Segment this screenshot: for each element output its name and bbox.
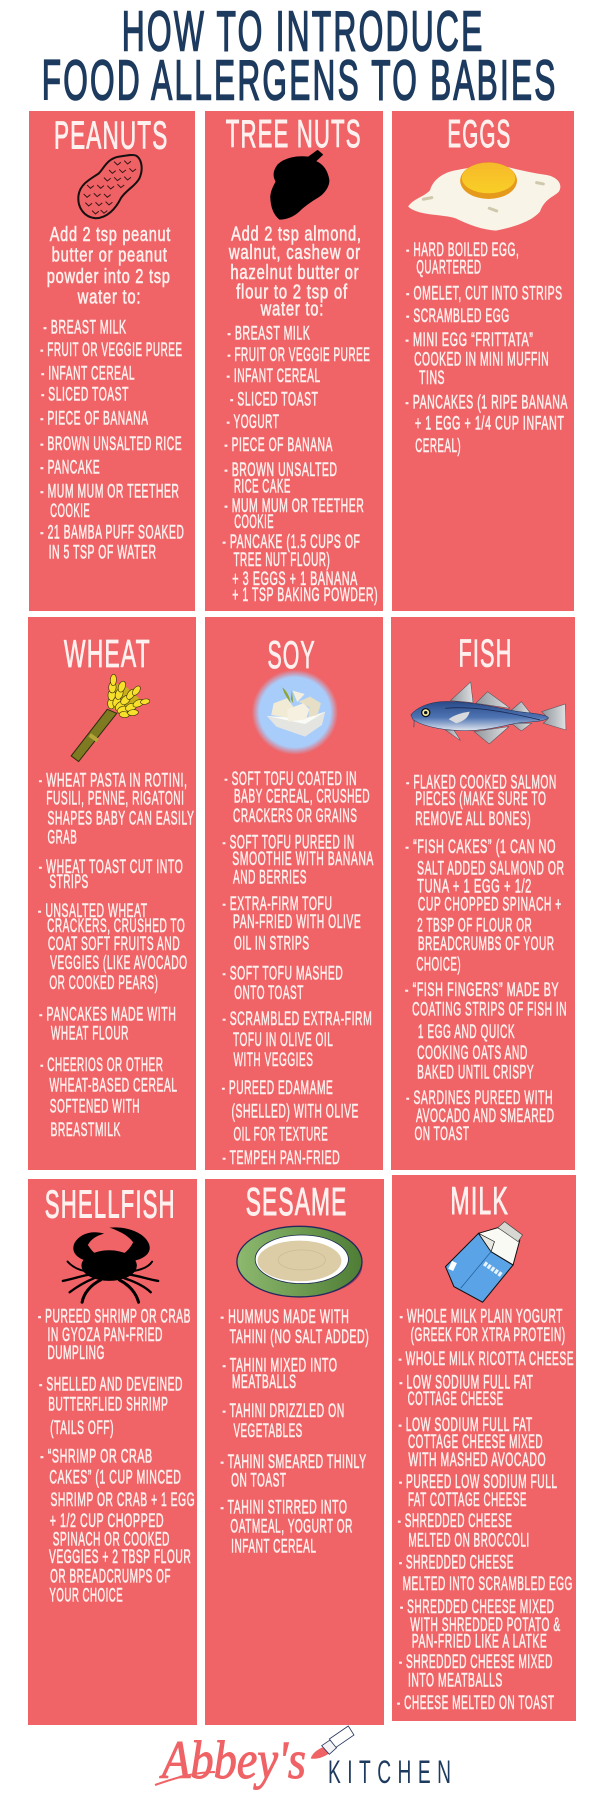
icon: fish [411, 682, 566, 744]
panel: shellfish [28, 1179, 197, 1725]
list: milk: INTO MEATBALLS [408, 1669, 503, 1690]
list: sesame: MEATBALLS [232, 1371, 297, 1392]
list: eggs: CEREAL) [415, 435, 461, 456]
title [42, 0, 558, 112]
panel: soy [205, 617, 383, 1170]
list: shellfish: (TAILS OFF) [50, 1417, 114, 1438]
intro text: tree nuts: walnut, cashew or [228, 242, 361, 264]
list: sesame: VEGETABLES [233, 1420, 303, 1441]
list: soy: PAN-FRIED WITH OLIVE [233, 912, 361, 933]
list: wheat: VEGGIES (LIKE AVOCADO [50, 952, 188, 974]
list: soy: WITH VEGGIES [233, 1050, 313, 1071]
heading: fish: FISH [458, 631, 512, 675]
list: tree nuts: RICE CAKE [234, 475, 291, 497]
list: eggs: - SCRAMBLED EGG [406, 305, 510, 326]
panel: milk [392, 1175, 576, 1721]
icon: hummus plate [237, 1226, 362, 1297]
icon: peanut [78, 155, 142, 218]
list: tree nuts: - SLICED TOAST [230, 388, 318, 409]
list: wheat: - CHEERIOS OR OTHER [40, 1054, 163, 1076]
icon: lipstick [311, 1726, 354, 1759]
list: wheat: - WHEAT PASTA IN ROTINI, [39, 770, 188, 791]
list: wheat: SOFTENED WITH [50, 1096, 140, 1118]
list: soy: (SHELLED) WITH OLIVE [232, 1101, 359, 1122]
list: soy: - SOFT TOFU PUREED IN [222, 832, 355, 853]
heading: sesame: SESAME [246, 1180, 347, 1224]
list: tree nuts: - BREAST MILK [227, 322, 310, 344]
list: sesame: - TAHINI SMEARED THINLY [220, 1451, 367, 1472]
list: eggs [405, 239, 568, 456]
list: tree nuts: COOKIE [234, 511, 274, 532]
list: sesame: INFANT CEREAL [231, 1535, 316, 1557]
heading: milk: MILK [450, 1179, 509, 1223]
list: tree nuts [222, 322, 378, 605]
list: shellfish: SHRIMP OR CRAB + 1 EGG [51, 1488, 195, 1510]
list: sesame: - TAHINI MIXED INTO [222, 1354, 338, 1375]
panel: tree nuts [205, 111, 383, 611]
list: peanuts: IN 5 TSP OF WATER [49, 541, 157, 562]
list: milk: COTTAGE CHEESE [408, 1388, 504, 1409]
list: shellfish: SPINACH OR COOKED [53, 1528, 170, 1549]
heading: eggs: EGGS [447, 113, 511, 156]
heading: shellfish: SHELLFISH [45, 1183, 176, 1227]
icon: tofu [252, 670, 338, 755]
heading: peanuts: PEANUTS [54, 114, 168, 158]
intro text: peanuts: Add 2 tsp peanut [50, 224, 171, 246]
list: soy: CRACKERS OR GRAINS [233, 805, 357, 827]
list: shellfish: DUMPLING [47, 1342, 105, 1363]
list: fish: CHOICE) [416, 954, 461, 975]
icon: fried egg [408, 162, 560, 231]
list: tree nuts: - INFANT CEREAL [227, 365, 321, 386]
list: wheat: BREASTMILK [51, 1119, 121, 1141]
list: peanuts: - FRUIT OR VEGGIE PUREE [40, 339, 183, 360]
list: soy: - EXTRA-FIRM TOFU [222, 893, 333, 915]
list: shellfish: CAKES” (1 CUP MINCED [49, 1466, 181, 1488]
list: tree nuts: + 3 EGGS + 1 BANANA [232, 568, 358, 589]
intro text: peanuts: water to: [77, 286, 141, 309]
list: eggs: TINS [419, 367, 445, 388]
list: tree nuts: - BROWN UNSALTED [224, 459, 338, 480]
intro text: tree nuts [228, 223, 362, 321]
intro text: tree nuts: hazelnut butter or [230, 262, 359, 284]
list: soy: BABY CEREAL, CRUSHED [234, 786, 370, 808]
list: tree nuts: - YOGURT [227, 411, 279, 432]
list: sesame [220, 1306, 369, 1557]
list: soy: - SOFT TOFU COATED IN [224, 768, 357, 790]
list: soy: SMOOTHIE WITH BANANA [232, 849, 374, 870]
list: shellfish: OR BREADCRUMPS OF [50, 1565, 171, 1587]
list: soy: OIL IN STRIPS [234, 933, 310, 954]
list: peanuts: - MUM MUM OR TEETHER [40, 480, 179, 501]
icon: wheat bundle [71, 674, 150, 762]
list: shellfish: + 1/2 CUP CHOPPED [50, 1510, 164, 1531]
list: tree nuts: - PIECE OF BANANA [224, 434, 333, 455]
intro text: peanuts: powder into 2 tsp [47, 266, 171, 288]
list: soy [222, 768, 374, 1169]
list: sesame: TAHINI (NO SALT ADDED) [230, 1325, 369, 1347]
list: shellfish: IN GYOZA PAN-FRIED [47, 1323, 163, 1345]
icon: milk carton [445, 1222, 523, 1302]
list: wheat: FUSILI, PENNE, RIGATONI [46, 788, 184, 809]
list: wheat: SHAPES BABY CAN EASILY [47, 808, 194, 829]
list: fish [405, 772, 567, 1145]
list: fish: ON TOAST [414, 1123, 470, 1145]
intro text: tree nuts: flour to 2 tsp of [236, 281, 348, 304]
list: peanuts: - BREAST MILK [43, 316, 127, 338]
list: wheat: STRIPS [49, 872, 89, 893]
list: tree nuts: TREE NUT FLOUR) [233, 549, 330, 570]
list: milk [397, 1305, 574, 1713]
panel: eggs [392, 111, 574, 611]
list: peanuts: - SLICED TOAST [41, 383, 129, 405]
intro text: peanuts [47, 224, 171, 309]
list: sesame: - TAHINI STIRRED INTO [220, 1496, 347, 1518]
list: peanuts: - PANCAKE [40, 456, 100, 477]
heading: wheat: WHEAT [64, 632, 151, 676]
list: wheat: CRACKERS, CRUSHED TO [47, 916, 185, 937]
panel: wheat [28, 617, 196, 1170]
list: shellfish: VEGGIES + 2 TBSP FLOUR [49, 1546, 191, 1567]
heading: soy: SOY [268, 633, 316, 677]
list: soy: - PUREED EDAMAME [222, 1077, 333, 1099]
logo swash [155, 1772, 215, 1785]
panel: sesame [205, 1179, 384, 1725]
list: sesame: ON TOAST [231, 1469, 287, 1491]
list: wheat: COAT SOFT FRUITS AND [48, 934, 180, 955]
list: tree nuts: - MUM MUM OR TEETHER [224, 495, 364, 516]
list: shellfish: - “SHRIMP OR CRAB [40, 1445, 153, 1467]
list: wheat: WHEAT-BASED CEREAL [49, 1075, 178, 1097]
list: peanuts: - BROWN UNSALTED RICE [40, 433, 182, 454]
list: wheat: - UNSALTED WHEAT [38, 900, 148, 922]
intro text: tree nuts: Add 2 tsp almond, [231, 223, 362, 245]
list: tree nuts: - PANCAKE (1.5 CUPS OF [222, 531, 361, 552]
list: peanuts: COOKIE [50, 500, 90, 521]
list: soy: AND BERRIES [233, 867, 307, 889]
list: soy: - SCRAMBLED EXTRA-FIRM [222, 1009, 372, 1030]
list: soy: ONTO TOAST [234, 982, 304, 1004]
list: soy: OIL FOR TEXTURE [233, 1124, 328, 1146]
list: soy: - TEMPEH PAN-FRIED [222, 1147, 340, 1169]
logo: Abbey's Kitchen [155, 1726, 451, 1790]
icon: tree nut [271, 151, 329, 219]
list: tree nuts: - FRUIT OR VEGGIE PUREE [227, 344, 370, 365]
list: wheat [38, 770, 194, 1141]
list: soy: - SOFT TOFU MASHED [222, 963, 343, 984]
list: peanuts [40, 316, 184, 562]
list: peanuts: - 21 BAMBA PUFF SOAKED [40, 521, 184, 543]
list: sesame: OATMEAL, YOGURT OR [230, 1515, 353, 1537]
list: shellfish: - SHELLED AND DEVEINED [39, 1373, 183, 1395]
list: shellfish [38, 1305, 195, 1606]
list: eggs: QUARTERED [416, 256, 481, 278]
list: sesame: - HUMMUS MADE WITH [220, 1306, 349, 1327]
list: wheat: - WHEAT TOAST CUT INTO [39, 856, 183, 878]
icon: crab [63, 1227, 158, 1302]
panel: peanuts [29, 111, 195, 611]
list: peanuts: - INFANT CEREAL [41, 362, 135, 384]
logo script: Abbey's [159, 1730, 306, 1790]
list: sesame: - TAHINI DRIZZLED ON [222, 1400, 345, 1421]
logo wordmark: KITCHEN [328, 1754, 451, 1790]
list: tree nuts: + 1 TSP BAKING POWDER) [232, 584, 378, 605]
list: shellfish: BUTTERFLIED SHRIMP [48, 1393, 168, 1415]
list: peanuts: - PIECE OF BANANA [40, 407, 148, 429]
list: wheat: WHEAT FLOUR [51, 1023, 129, 1045]
intro text: peanuts: butter or peanut [52, 244, 168, 267]
panel: fish [391, 617, 575, 1170]
list: shellfish: YOUR CHOICE [49, 1584, 123, 1606]
list: shellfish: - PUREED SHRIMP OR CRAB [38, 1305, 191, 1327]
intro text: tree nuts: water to: [260, 298, 324, 321]
list: soy: TOFU IN OLIVE OIL [233, 1030, 333, 1051]
list: wheat: - PANCAKES MADE WITH [39, 1004, 176, 1025]
list: wheat: GRAB [47, 827, 77, 848]
list: wheat: OR COOKED PEARS) [49, 972, 158, 994]
heading: tree nuts: TREE NUTS [226, 113, 362, 156]
